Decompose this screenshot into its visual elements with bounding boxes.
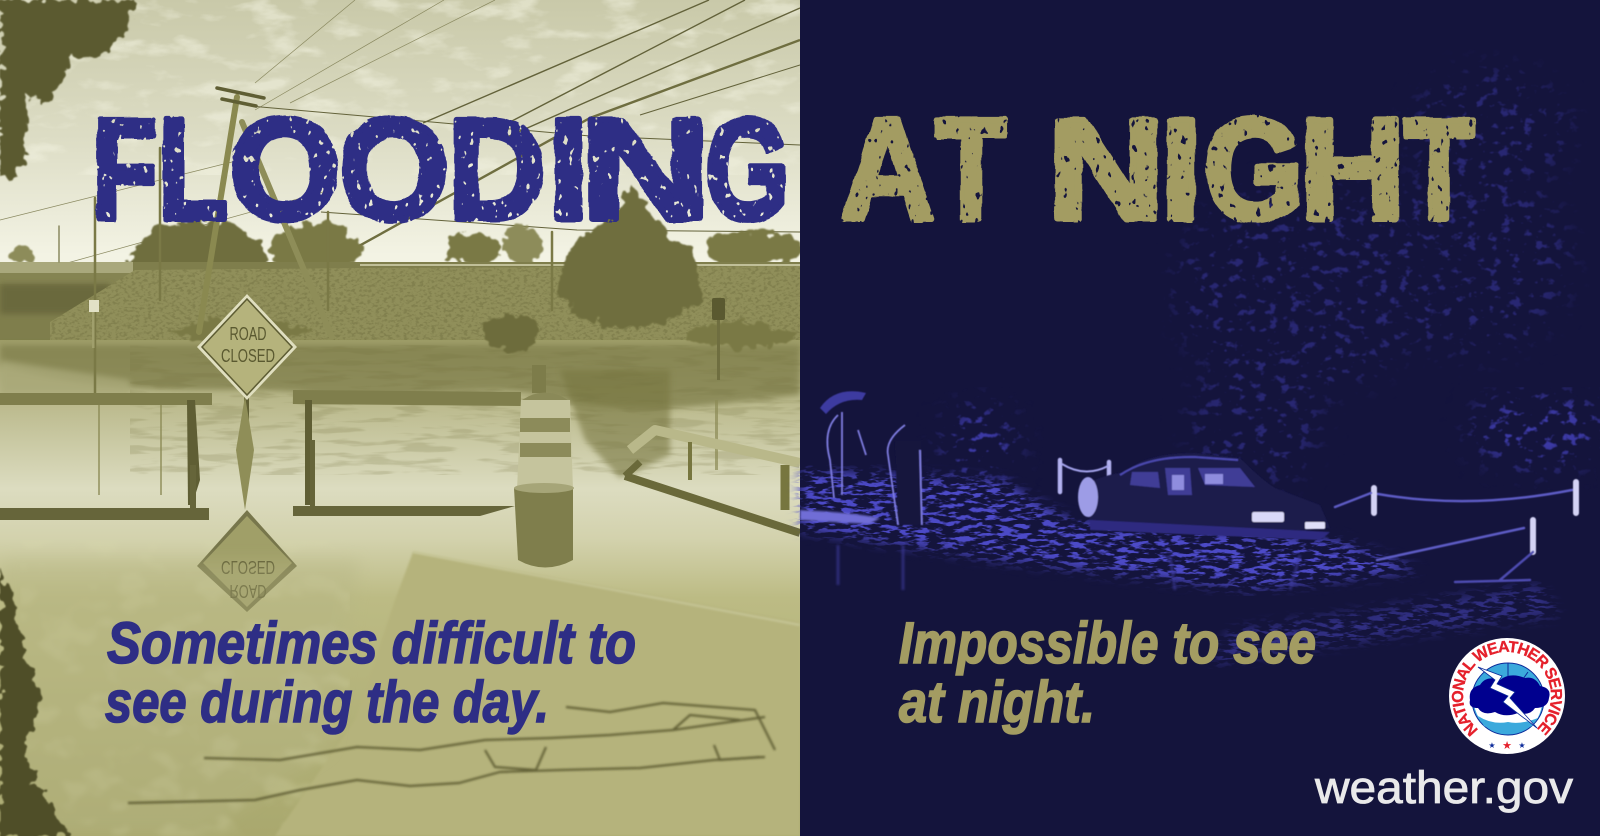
foreground tree top-left	[0, 0, 135, 185]
road surface	[275, 552, 800, 836]
power lines	[0, 0, 800, 265]
title word: FLOODING: O	[229, 89, 340, 250]
daytime caption: see during the day.	[105, 670, 549, 735]
NWS logo: ★	[1502, 739, 1512, 752]
reflections on dark water	[838, 545, 1300, 590]
ground base behind bridge	[0, 262, 800, 340]
title words: AT NIGHT: T	[1404, 89, 1474, 250]
clouds	[0, 0, 800, 175]
foreground foliage reflection	[0, 570, 70, 836]
reflected road closed sign: ROAD	[230, 581, 266, 601]
route sign	[712, 298, 725, 380]
pavement cracks	[128, 703, 775, 803]
title word: FLOODING: I	[548, 89, 589, 250]
reflected barrier	[0, 440, 515, 520]
lower grass strip	[1210, 585, 1560, 665]
large roadside tree	[556, 182, 705, 330]
night caption: Impossible to see	[899, 611, 1316, 676]
grass texture	[50, 266, 800, 340]
bridge	[0, 262, 133, 314]
title words: AT NIGHT: I	[1160, 89, 1202, 250]
title word: FLOODING: D	[448, 89, 546, 250]
title word: FLOODING: O	[338, 89, 449, 250]
panel: daytime flooded road photo	[0, 0, 802, 836]
water reflections	[98, 395, 718, 495]
barricade barrel	[514, 365, 574, 568]
road closed sign: ROAD	[230, 324, 266, 344]
title words: AT NIGHT: N	[1047, 89, 1165, 250]
daytime caption: Sometimes difficult to	[107, 611, 636, 676]
title words: AT NIGHT: H	[1299, 89, 1406, 250]
grassy bank	[50, 266, 800, 340]
title word: FLOODING: L	[158, 89, 229, 250]
road closed sign	[197, 294, 297, 450]
far route sign	[89, 300, 99, 348]
title word: FLOODING: G	[706, 89, 789, 250]
NWS logo: NATIONAL WEATHER SERVICE	[1452, 640, 1562, 737]
night caption: at night.	[899, 670, 1095, 735]
person with umbrella	[820, 391, 866, 498]
ripples in reflection	[130, 364, 800, 475]
foliage speckle	[1175, 70, 1570, 490]
daytime caption	[105, 611, 636, 735]
NWS logo: ★	[1518, 741, 1526, 750]
panel: nighttime flooded road photo	[790, 58, 1600, 813]
website address: weather.gov	[1314, 762, 1574, 813]
reflected road closed sign: CLOSED	[221, 557, 275, 577]
second person	[888, 425, 922, 525]
reflected road closed sign	[197, 510, 297, 612]
flooded ground band	[800, 470, 1420, 590]
glare streak	[800, 510, 880, 524]
title word: FLOODING: N	[580, 89, 711, 250]
sky	[0, 0, 800, 262]
title word: FLOODING: F	[92, 89, 158, 250]
title words: AT NIGHT: T	[936, 89, 1006, 250]
title words: AT NIGHT: A	[840, 89, 935, 250]
submerged car	[1078, 453, 1330, 540]
distant tree line	[7, 218, 800, 262]
posts and ropes	[1060, 460, 1576, 582]
road closed sign: CLOSED	[221, 346, 275, 366]
night background	[800, 0, 1600, 836]
water	[0, 340, 800, 836]
title words: AT NIGHT: G	[1204, 89, 1304, 250]
night caption	[899, 611, 1316, 735]
shrubs on the bank	[170, 314, 795, 350]
bright leaves right side	[944, 392, 1600, 485]
sky reflection patches	[37, 678, 348, 836]
barrier rails	[0, 390, 521, 505]
NWS logo: ★	[1488, 741, 1496, 750]
utility poles	[59, 88, 552, 400]
guard rail	[625, 430, 800, 533]
